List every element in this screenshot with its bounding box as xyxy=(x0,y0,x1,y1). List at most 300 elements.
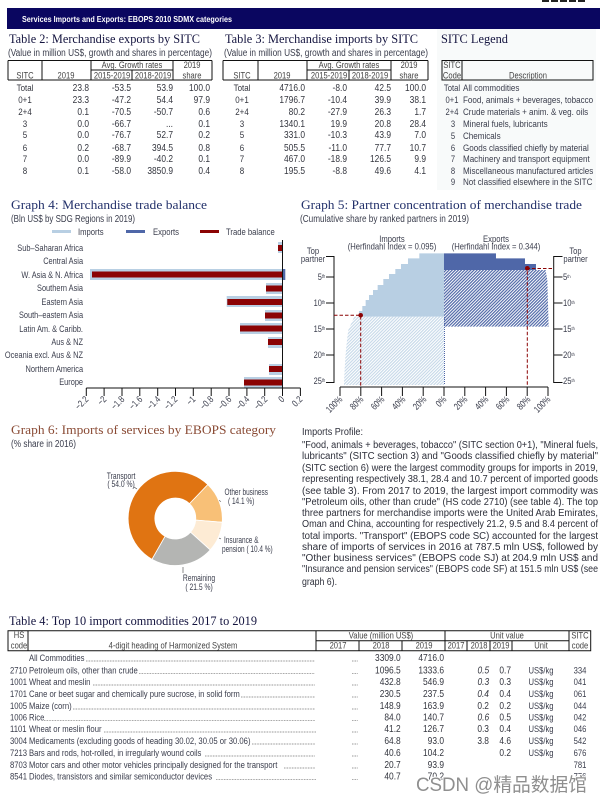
table 4 header: HS xyxy=(14,629,25,640)
share axis: 80% xyxy=(347,393,366,412)
table 4 header: 2017 xyxy=(448,640,465,651)
table 4 header xyxy=(8,629,591,651)
table 2 rows: 0.0 xyxy=(77,118,89,129)
table 3 rows: 126.5 xyxy=(370,153,391,164)
table 3 title: Table 3: Merchandise imports by SITC xyxy=(225,32,418,46)
graph 4 axes: 0 xyxy=(276,393,287,404)
table 2 rows: -89.9 xyxy=(112,153,131,164)
graph 4 axes: −1 xyxy=(184,393,198,407)
table 2 rows: 5 xyxy=(23,129,27,140)
table 2 rows: 0.1 xyxy=(198,118,210,129)
graph 4 axes: −0.2 xyxy=(251,393,270,412)
left rank axis: 10 xyxy=(314,297,322,308)
table 2 rows: 53.9 xyxy=(157,82,173,93)
share axis: 60% xyxy=(493,393,512,412)
donut labels: Remaining xyxy=(183,573,215,583)
donut labels: ( 21.5 %) xyxy=(185,582,213,592)
table 2 rows: 100.0 xyxy=(189,82,210,93)
table 3 rows: -10.3 xyxy=(328,129,347,140)
table 4 commodity names: 1101 xyxy=(10,723,27,734)
table 2 rows: 0+1 xyxy=(18,94,32,105)
table 4 commodity names: Maize (corn) xyxy=(29,700,72,711)
table 2 rows: 0.2 xyxy=(77,142,89,153)
table 4 values: 044 xyxy=(574,700,587,711)
table 2 rows xyxy=(17,82,210,176)
left rank axis: th xyxy=(322,300,326,305)
exports solid staircase xyxy=(444,253,536,270)
table 4 values: 0.5 xyxy=(499,712,511,723)
donut labels: pension ( 10.4 %) xyxy=(222,544,273,554)
table 2 rows: 394.5 xyxy=(152,142,173,153)
table 3 rows: 7 xyxy=(240,153,244,164)
table 4 values: US$/kg xyxy=(528,676,554,687)
profile paragraph: share of imports of services in 2016 at 787.5 mln US$, followed by xyxy=(302,542,598,553)
graph 4 region labels: Northern America xyxy=(26,363,83,374)
table 4 commodity names: 1005 xyxy=(10,700,27,711)
table 4 values: 4716.0 xyxy=(418,652,444,663)
right rank axis: 15 xyxy=(563,323,572,334)
left rank axis: 25 xyxy=(314,375,322,386)
table 4 values: 148.9 xyxy=(380,700,401,711)
table 2 rows: 23.3 xyxy=(73,94,89,105)
table 3 rows: 3 xyxy=(240,118,244,129)
donut labels: ( 14.1 %) xyxy=(228,496,255,506)
legend rows: 8 xyxy=(451,165,455,176)
table 3 rows: 39.9 xyxy=(375,94,391,105)
table 2 rows: 2+4 xyxy=(18,106,32,117)
right rank axis: th xyxy=(567,274,571,279)
table 4 values: 041 xyxy=(574,676,587,687)
graph 4 region labels: Central Asia xyxy=(43,255,83,266)
imports label: (Herfindahl Index = 0.095) xyxy=(348,241,437,252)
legend rows: 0+1 xyxy=(446,94,459,105)
graph 4 axes: −1.4 xyxy=(144,393,163,412)
table 2 rows: 7 xyxy=(23,153,27,164)
table 3 rows: -8.0 xyxy=(333,82,347,93)
right rank axis: th xyxy=(572,300,575,305)
legend rows: 7 xyxy=(451,153,455,164)
graph 4 axes xyxy=(72,240,305,412)
imports hatched area xyxy=(344,317,444,385)
table 2 rows: -58.0 xyxy=(112,165,131,176)
table 2 rows: 0.1 xyxy=(77,165,89,176)
table 2 rows: 3 xyxy=(23,118,27,129)
header band xyxy=(7,8,600,29)
graph 4 axes: −2.2 xyxy=(72,393,91,412)
right rank axis xyxy=(554,245,588,386)
share axis: 20% xyxy=(410,393,429,412)
table 4 title: Table 4: Top 10 import commodities 2017 to 2019 xyxy=(9,614,257,628)
left rank axis: 20 xyxy=(314,349,322,360)
share axis: 100% xyxy=(531,393,553,415)
table 4 values: 676 xyxy=(574,747,587,758)
table 3 rows: 1.7 xyxy=(414,106,426,117)
right rank axis: 25 xyxy=(563,375,572,386)
exports hatched area xyxy=(444,270,549,327)
table 4 values: 0.6 xyxy=(477,712,490,723)
table 4 commodity names: Rice xyxy=(29,712,45,723)
table 3 rows: -8.8 xyxy=(333,165,347,176)
table 3 rows: 8 xyxy=(240,165,244,176)
table 3 header xyxy=(223,59,428,81)
table 4 commodity names: Bars and rods, hot-rolled, in irregularly wound coils xyxy=(29,747,201,758)
table 4 values: 40.7 xyxy=(384,771,401,782)
table 4 values: US$/kg xyxy=(528,700,554,711)
table 3 rows: 0+1 xyxy=(235,94,249,105)
graph 4 import bars xyxy=(90,242,282,388)
table 4 values: 781 xyxy=(574,759,587,770)
header band: Services Imports and Exports: EBOPS 2010 SDMX categories xyxy=(22,14,232,24)
table 4 commodity names: Wheat or meslin flour xyxy=(29,723,102,734)
graph 4 region labels: South–eastern Asia xyxy=(19,309,83,320)
legend rows xyxy=(444,82,594,187)
table 3 rows: 38.1 xyxy=(410,94,426,105)
table 3 rows: 49.6 xyxy=(375,165,391,176)
table 4 commodity names: 8541 xyxy=(10,771,27,782)
left rank axis: th xyxy=(322,274,326,279)
imports solid staircase xyxy=(359,253,444,317)
table 2 rows: 0.1 xyxy=(77,106,89,117)
profile paragraph: total imports. "Transport" (EBOPS code SC) accounted for the largest xyxy=(302,531,598,542)
left rank axis: partner xyxy=(301,253,325,264)
table 4 values: 0.3 xyxy=(477,676,490,687)
table 3 rows: 331.0 xyxy=(284,129,305,140)
table 4 commodity names: 3004 xyxy=(10,735,27,746)
table 4 commodity names xyxy=(10,652,278,782)
graph 4 region labels: W. Asia & N. Africa xyxy=(21,269,83,280)
graph 4 region labels: Sub–Saharan Africa xyxy=(17,242,83,253)
table 3 rows: 26.3 xyxy=(375,106,391,117)
table 3 rows: 100.0 xyxy=(405,82,426,93)
donut labels: ( 54.0 %) xyxy=(107,479,135,489)
right rank axis: 20 xyxy=(563,349,572,360)
table 2 rows: -68.7 xyxy=(112,142,131,153)
table 4 values: 64.8 xyxy=(384,735,401,746)
table 4 values: 334 xyxy=(574,665,587,676)
table 4 values: US$/kg xyxy=(528,665,554,676)
legend header: SITC xyxy=(443,59,461,70)
table 2 header: SITC xyxy=(16,70,34,81)
legend header xyxy=(442,59,593,81)
table 3 rows: 7.0 xyxy=(414,129,426,140)
share axis: 40% xyxy=(472,393,491,412)
graph 4 axes: −0.4 xyxy=(233,393,252,412)
exports label: Exports xyxy=(483,233,509,244)
table 2 header xyxy=(8,59,212,81)
table 3 rows: 4716.0 xyxy=(279,82,305,93)
table 4 header: SITC xyxy=(571,630,589,641)
table 2 header: share xyxy=(183,70,202,81)
table 4 commodity names: Diodes, transistors and similar semiconductor devices xyxy=(29,771,212,782)
table 4 values: 042 xyxy=(574,712,587,723)
graph 6: imports of services xyxy=(11,423,277,592)
table 4 header: 2018 xyxy=(373,640,390,651)
left rank axis: th xyxy=(322,326,326,331)
table 3 rows: -18.9 xyxy=(328,153,347,164)
share axis xyxy=(323,387,553,415)
table 3 rows: 2+4 xyxy=(235,106,249,117)
table 3 rows xyxy=(234,82,426,176)
table 4 header: Unit xyxy=(534,640,548,651)
right rank axis: th xyxy=(572,326,575,331)
table 4 values: 41.2 xyxy=(384,723,401,734)
graph 4 legend: Trade balance xyxy=(226,226,275,237)
table 2 rows: 0.2 xyxy=(198,129,210,140)
table 3 rows: 20.8 xyxy=(375,118,391,129)
graph 4 export bar xyxy=(282,269,285,280)
donut chart xyxy=(128,471,222,565)
table 3 rows: -27.9 xyxy=(328,106,347,117)
table 3 rows: Total xyxy=(234,82,250,93)
other business segment xyxy=(190,485,222,522)
table 4 commodity names: 7213 xyxy=(10,747,27,758)
legend rows: 3 xyxy=(451,118,455,129)
table 4 values: 0.2 xyxy=(477,700,489,711)
table 2 title: Table 2: Merchandise exports by SITC xyxy=(9,32,200,46)
table 3 rows: -11.0 xyxy=(329,142,347,153)
table 4 commodity names: Cane or beet sugar and chemically pure sucrose, in solid form xyxy=(29,688,240,699)
table 4 values: 1096.5 xyxy=(375,665,401,676)
legend rows: Not classified elsewhere in the SITC xyxy=(463,176,593,187)
table 4 values: US$/kg xyxy=(528,723,554,734)
table 3 rows: 5 xyxy=(240,129,244,140)
table 4 commodity names: 1001 xyxy=(10,676,27,687)
table 4 values: 140.7 xyxy=(423,712,444,723)
profile paragraph: graph 6). xyxy=(302,577,337,588)
table 2 rows: 23.8 xyxy=(73,82,89,93)
table 2 rows: Total xyxy=(17,82,33,93)
imports profile text block xyxy=(302,427,598,588)
table 3 rows: 1796.7 xyxy=(279,94,305,105)
legend rows: All commodities xyxy=(463,82,520,93)
graph 4 region labels xyxy=(5,242,83,387)
table 4 values: 0.4 xyxy=(477,688,489,699)
table 4 values: 0.4 xyxy=(499,688,511,699)
graph 4 region labels: Southern Asia xyxy=(37,282,83,293)
table 4 commodity names: 1701 xyxy=(10,688,27,699)
table 2 rows: 8 xyxy=(23,165,27,176)
table 2 header: 2019 xyxy=(184,59,201,70)
table 4 values: US$/kg xyxy=(528,735,554,746)
table 4 values: 230.5 xyxy=(380,688,401,699)
right rank axis: 10 xyxy=(563,297,572,308)
table 4 values: 93.0 xyxy=(428,735,444,746)
share axis: 40% xyxy=(389,393,408,412)
table 3 rows: -10.4 xyxy=(328,94,347,105)
legend rows: 5 xyxy=(451,130,455,141)
table 4 values: US$/kg xyxy=(528,688,554,699)
table 4 header: 2019 xyxy=(493,640,510,651)
table 2 rows: 0.6 xyxy=(198,106,210,117)
right rank axis: partner xyxy=(563,253,588,264)
table 3 rows: 4.1 xyxy=(414,165,426,176)
table 4 commodity names: 8703 xyxy=(10,759,27,770)
table 3 header: share xyxy=(400,70,419,81)
donut labels: Insurance & xyxy=(224,535,259,545)
table 4 header: 2018 xyxy=(471,640,488,651)
table 4 values: US$/kg xyxy=(528,712,554,723)
graph 4 region labels: Europe xyxy=(59,376,83,387)
table 2 rows: -53.5 xyxy=(112,82,131,93)
legend rows: Goods classified chiefly by material xyxy=(463,142,589,153)
table 3 header: 2019 xyxy=(274,70,291,81)
table 2: merchandise exports xyxy=(8,32,212,176)
table 4 values: 93.9 xyxy=(428,759,444,770)
donut labels: Transport xyxy=(107,471,136,481)
table 3 rows: 77.7 xyxy=(375,142,391,153)
legend rows: Machinery and transport equipment xyxy=(463,153,590,164)
graph 4 region labels: Latin Am. & Caribb. xyxy=(19,323,83,334)
table 3 rows: 467.0 xyxy=(284,153,305,164)
table 4: top 10 import commodities xyxy=(8,614,591,782)
imports marker xyxy=(334,313,363,386)
table 4 commodity names: 2710 xyxy=(10,665,27,676)
watermark: CSDN @精品数据馆 xyxy=(416,774,587,796)
table 4 commodity names: Medicaments (excluding goods of heading 30.02, 30.05 or 30.06) xyxy=(29,735,251,746)
right rank axis: th xyxy=(572,378,575,383)
exports label xyxy=(452,233,541,252)
table 4 commodity names: 1006 xyxy=(10,712,27,723)
profile paragraph: "Other business services" (EBOPS code SJ) at 204.9 mln US$ and xyxy=(302,553,598,564)
table 3 rows: 9.9 xyxy=(414,153,426,164)
table 2 rows: -66.7 xyxy=(112,118,131,129)
graph 5 title: Graph 5: Partner concentration of merchandise trade xyxy=(301,198,582,212)
insurance segment xyxy=(190,520,222,550)
table 4 leader dots xyxy=(44,661,358,780)
table 4 values: 0.7 xyxy=(499,665,511,676)
legend rows: 6 xyxy=(451,142,455,153)
graph 4 axes: −1.6 xyxy=(126,393,145,412)
table 3 rows: 43.9 xyxy=(375,129,391,140)
graph 4 axes: −2 xyxy=(95,393,109,407)
table 3 header: 2019 xyxy=(401,59,418,70)
legend header: Description xyxy=(509,70,547,81)
graph 4 axes: −0.8 xyxy=(197,393,216,412)
share axis: 100% xyxy=(323,393,345,415)
donut labels xyxy=(107,471,273,592)
exports marker xyxy=(525,266,552,386)
legend rows: 9 xyxy=(451,176,455,187)
remaining segment xyxy=(152,532,210,565)
graph 4 trade balance bars xyxy=(92,245,282,386)
table 4 commodity names: All Commodities xyxy=(29,652,84,663)
graph 5 subtitle: (Cumulative share by ranked partners in 2019) xyxy=(300,214,469,225)
table 4 header: 2017 xyxy=(330,640,347,651)
table 2 header: 2015-2019 xyxy=(94,70,130,81)
table 3 rows: 1340.1 xyxy=(279,118,305,129)
graph 4 axes: −1.2 xyxy=(161,393,180,412)
table 2 rows: ... xyxy=(166,118,173,129)
table 3 rows: 28.4 xyxy=(410,118,426,129)
graph 4 subtitle: (Bln US$ by SDG Regions in 2019) xyxy=(11,214,135,225)
table 4 values: US$/kg xyxy=(528,747,554,758)
graph 4 legend: Exports xyxy=(153,226,179,237)
table 4 commodity names: Petroleum oils, other than crude xyxy=(29,665,138,676)
table 4 commodity names: Motor cars and other motor vehicles principally designed for the transport xyxy=(29,759,278,770)
profile paragraph: lubricants" (SITC section 3) and "Goods classified chiefly by material" xyxy=(302,451,598,462)
imports label: Imports xyxy=(379,233,405,244)
table 4 values: 0.2 xyxy=(499,700,511,711)
table 3 header: 2018-2019 xyxy=(352,70,388,81)
graph 4 legend xyxy=(52,226,275,237)
table 4 header: Value (million US$) xyxy=(349,630,413,641)
table 3 rows: 10.7 xyxy=(410,142,426,153)
graph 4 legend: Imports xyxy=(78,226,104,237)
panel: SITC legend xyxy=(437,29,596,190)
table 2 rows: -50.7 xyxy=(154,106,173,117)
table 3 rows: 505.5 xyxy=(284,142,305,153)
table 4 header: 2019 xyxy=(416,640,433,651)
left rank axis: th xyxy=(322,352,326,357)
graph 4 region labels: Eastern Asia xyxy=(42,296,83,307)
graph 4 title: Graph 4: Merchandise trade balance xyxy=(11,198,207,212)
table 4 values: 546.9 xyxy=(423,676,444,687)
table 2 rows: 0.0 xyxy=(77,129,89,140)
table 4 values: 126.7 xyxy=(423,723,444,734)
table 3 rows: 195.5 xyxy=(284,165,305,176)
left rank axis: Top xyxy=(307,245,320,256)
share axis: 60% xyxy=(368,393,387,412)
table 4 values: 0.4 xyxy=(499,723,511,734)
right rank axis: Top xyxy=(569,245,582,256)
table 4 values: 061 xyxy=(574,688,587,699)
table 2 header: Avg. Growth rates xyxy=(102,59,162,70)
table 2 rows: 0.0 xyxy=(77,153,89,164)
table 4 values: 104.2 xyxy=(423,747,444,758)
imports label xyxy=(348,233,437,252)
table 2 header: 2018-2019 xyxy=(135,70,171,81)
graph 4: merchandise trade balance xyxy=(5,198,305,412)
table 2 rows: -76.7 xyxy=(112,129,131,140)
table 4 values: 163.9 xyxy=(423,700,444,711)
left rank axis: 15 xyxy=(314,323,322,334)
legend rows: Mineral fuels, lubricants xyxy=(463,118,548,129)
table 4 values: 3.8 xyxy=(477,735,489,746)
table 3 rows: 6 xyxy=(240,142,244,153)
table 4 values: 432.8 xyxy=(380,676,401,687)
table 4 values: 237.5 xyxy=(423,688,444,699)
table 4 header: 4-digit heading of Harmonized System xyxy=(109,640,237,651)
right rank axis: 5 xyxy=(563,271,567,282)
table 4 values: 1333.6 xyxy=(418,665,444,676)
table 2 rows: 6 xyxy=(23,142,27,153)
donut labels: Other business xyxy=(225,487,268,497)
table 3 header: 2015-2019 xyxy=(311,70,347,81)
legend rows: Food, animals + beverages, tobacco xyxy=(463,94,593,105)
legend rows: Total xyxy=(444,82,460,93)
share axis: 0% xyxy=(433,393,449,409)
table 4 values: 0.2 xyxy=(499,747,511,758)
table 2 rows: 0.8 xyxy=(198,142,210,153)
table 2 header: 2019 xyxy=(58,70,75,81)
graph 4 axes: −1.8 xyxy=(108,393,127,412)
table 4 header: code xyxy=(11,640,27,651)
exports label: (Herfindahl Index = 0.344) xyxy=(452,241,541,252)
table 4 values: 4.6 xyxy=(499,735,511,746)
table 4 values: 0.5 xyxy=(477,665,490,676)
table 2 rows: 97.9 xyxy=(194,94,210,105)
table 4 values: 20.7 xyxy=(384,759,401,770)
table 2 subtitle: (Value in million US$, growth and shares in percentage) xyxy=(8,48,212,59)
left rank axis: th xyxy=(322,378,326,383)
graph 4 axes: 0.2 xyxy=(289,393,305,409)
table 2 rows: -40.2 xyxy=(154,153,173,164)
table 2 rows: -70.5 xyxy=(112,106,131,117)
table 4 values: 046 xyxy=(574,723,587,734)
table 4 values: 70.2 xyxy=(428,771,444,782)
graph 4 region labels: Aus & NZ xyxy=(51,336,83,347)
legend rows: Crude materials + anim. & veg. oils xyxy=(463,106,589,117)
